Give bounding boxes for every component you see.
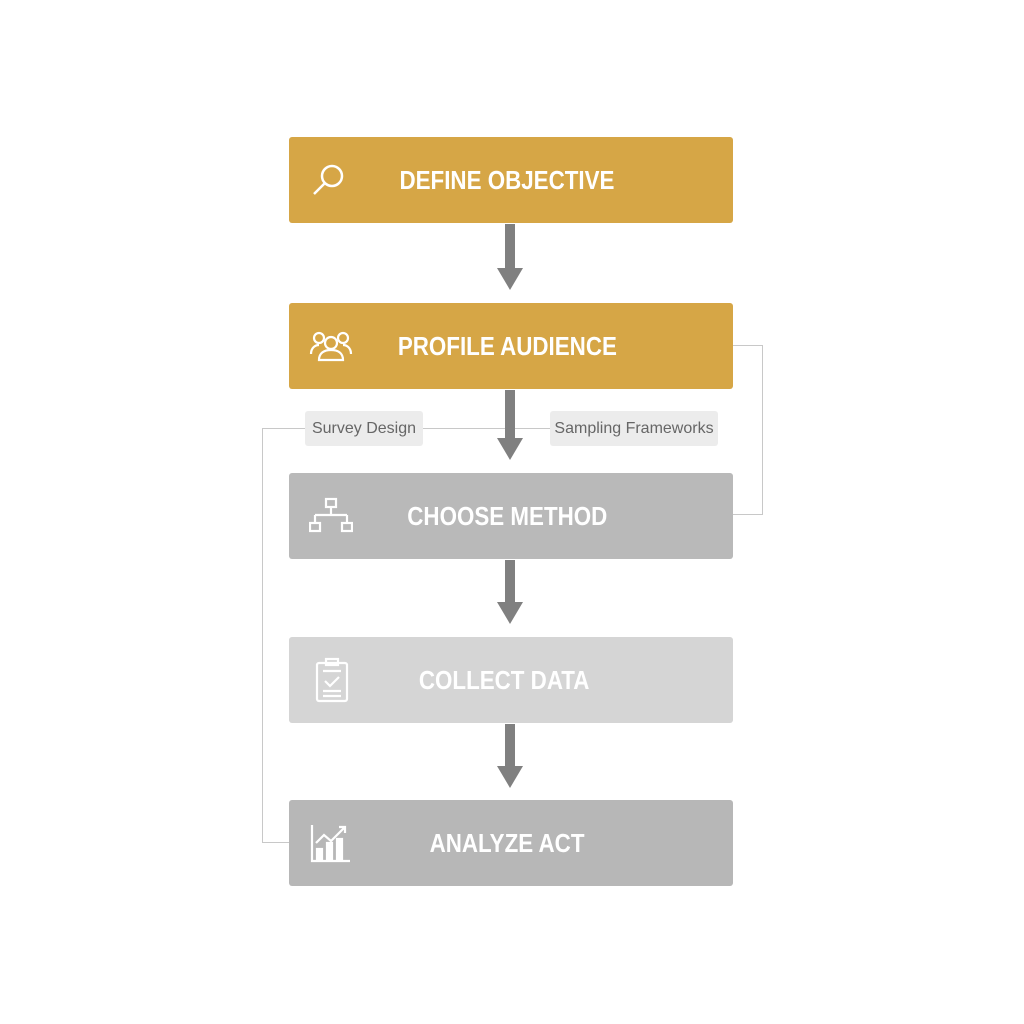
- step 4: collect data: COLLECT DATA: [419, 665, 589, 695]
- icon: people: [310, 332, 352, 362]
- step 1: define objective: DEFINE OBJECTIVE: [400, 165, 614, 195]
- label: sampling frameworks: [550, 411, 718, 446]
- step 3: choose method: CHOOSE METHOD: [407, 501, 607, 531]
- label: survey design: [305, 411, 423, 446]
- icon: hierarchy: [309, 498, 353, 532]
- step 5: analyze act: ANALYZE ACT: [430, 828, 584, 858]
- icon: magnifier: [313, 164, 344, 195]
- connector lines: [262, 345, 763, 843]
- arrow 3: [497, 560, 523, 624]
- icon: clipboard: [316, 658, 348, 702]
- arrow 1: [497, 224, 523, 290]
- arrow 2: [497, 390, 523, 460]
- step 2: profile audience: [289, 303, 733, 389]
- step 1: define objective: [289, 137, 733, 223]
- icon: chart: [310, 825, 350, 862]
- label: sampling frameworks: Sampling Frameworks: [554, 420, 714, 437]
- step 4: collect data: [289, 637, 733, 723]
- step 5: analyze act: [289, 800, 733, 886]
- arrow 4: [497, 724, 523, 788]
- label: survey design: Survey Design: [312, 420, 416, 437]
- step 2: profile audience: PROFILE AUDIENCE: [397, 331, 617, 361]
- step 3: choose method: [289, 473, 733, 559]
